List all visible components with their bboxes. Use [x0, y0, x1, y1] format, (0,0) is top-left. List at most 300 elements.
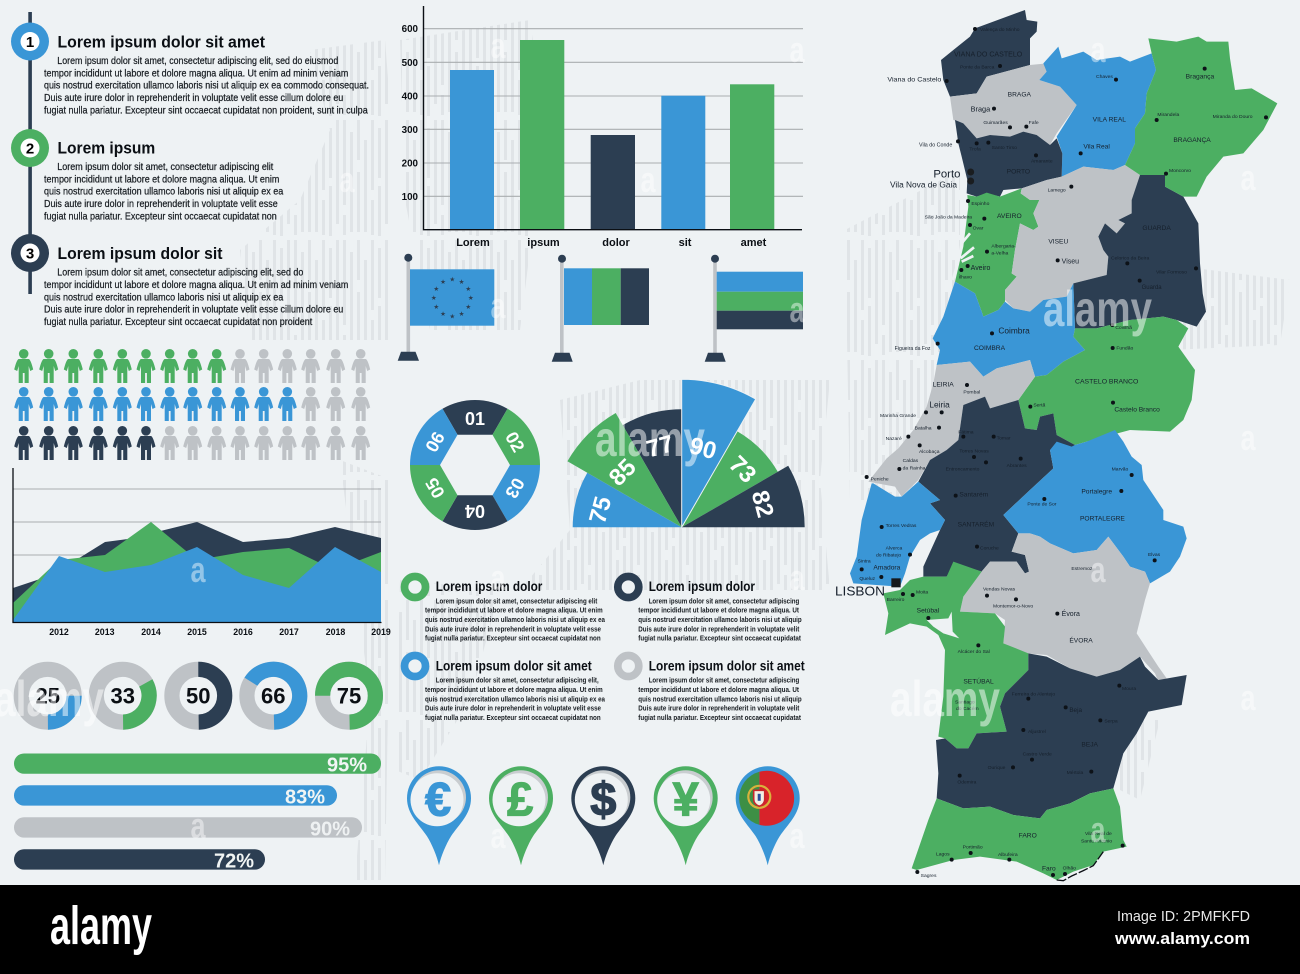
donut 33	[87, 660, 159, 732]
year labels: 2013	[95, 627, 115, 637]
region labels	[933, 52, 1211, 839]
region: Aveiro	[955, 188, 1039, 317]
text block: dark	[618, 576, 802, 643]
people row green	[14, 349, 370, 383]
x axis labels: amet	[741, 237, 767, 249]
city labels: Alverca	[886, 545, 903, 551]
background stripe world map	[240, 20, 1290, 880]
city labels: Ílhavo	[959, 274, 972, 281]
text block: green: Lorem ipsum dolor sit amet, consectetur adipiscing elit	[436, 596, 598, 605]
large city labels	[835, 73, 1214, 873]
step 3 body text: fugiat nulla pariatur. Excepteur sint occaecat cupidatat non proident	[44, 317, 312, 328]
small watermarks: a	[1240, 677, 1256, 718]
region: Bragança	[1125, 37, 1277, 197]
city labels: Alcácer do Sal	[958, 649, 990, 655]
sector 75	[573, 473, 682, 527]
city labels: Santiago	[955, 699, 975, 705]
segment 02	[485, 404, 548, 478]
small watermarks: a	[1240, 157, 1256, 198]
bar 95%	[14, 754, 381, 777]
city labels: Nazaré	[886, 436, 902, 442]
segment 01	[442, 400, 508, 435]
year labels: 2019	[371, 627, 391, 637]
text block: blue: Duis aute irure dolor in reprehenderit in voluptate velit esse	[425, 704, 601, 713]
region: Viseu	[1005, 165, 1140, 312]
text block: dark: quis nostrud exercitation ullamco laboris nisi ut aliquip	[638, 615, 802, 624]
city labels: Aljustrel	[1028, 729, 1046, 735]
large city labels: Évora	[1062, 609, 1080, 618]
large city labels: Bragança	[1186, 73, 1214, 80]
city labels: Marinha Grande	[880, 413, 916, 419]
donut 66	[237, 659, 310, 732]
EU stars: ★	[440, 278, 446, 286]
large city labels: Viana do Castelo	[887, 77, 942, 84]
sector 77	[623, 409, 682, 527]
city labels: Coruche	[980, 546, 999, 552]
text block: gray: Duis aute irure dolor in reprehenderit in voluptate velit	[638, 704, 800, 713]
sector 73: 73	[723, 451, 761, 489]
region labels: AVEIRO	[997, 213, 1022, 220]
city labels: Queluz	[859, 576, 876, 582]
city labels: Peniche	[871, 476, 889, 482]
city labels: Montemor-o-Novo	[993, 603, 1033, 609]
flag: vertical stripes	[552, 255, 649, 362]
segment 05	[402, 452, 465, 526]
city labels: Fátima	[958, 429, 974, 435]
timeline bar	[28, 12, 32, 294]
region labels: BRAGANÇA	[1173, 137, 1211, 144]
city labels: Guimarães	[983, 120, 1008, 126]
segment 04	[442, 495, 508, 530]
city labels: Celorico da Beira	[1111, 255, 1149, 261]
city labels: Lagos	[936, 851, 950, 857]
segment 02: 02	[501, 428, 529, 456]
EU stars: ★	[440, 310, 446, 318]
small watermarks: a	[490, 557, 506, 598]
flag: EU	[398, 254, 494, 361]
region: Faro	[912, 788, 1127, 880]
area chart	[13, 468, 391, 637]
y axis labels: 200	[402, 158, 419, 170]
large city labels: Beja	[1069, 707, 1082, 714]
large city labels: LISBON	[835, 584, 885, 598]
segment 03: 03	[501, 474, 529, 502]
pin: Portugal flag	[736, 766, 800, 865]
region labels: LEIRIA	[933, 382, 954, 389]
Sado estuary	[927, 612, 959, 638]
city labels: Miranda do Douro	[1213, 114, 1253, 120]
large city labels: Vila Nova de Gaia	[890, 180, 957, 190]
region: Lisbon	[850, 482, 945, 587]
text block: blue: quis nostrud exercitation ullamco laboris nisi ut aliquip ex ea	[425, 694, 606, 703]
large city labels: Guarda	[1142, 285, 1162, 291]
step 2 body text: tempor incididunt ut labore et dolore magna aliqua. Ut enim	[44, 174, 279, 185]
city labels: Estremoz	[1071, 566, 1093, 572]
donut 50	[172, 669, 225, 722]
sector 75: 75	[584, 494, 617, 526]
pin: euro: €	[425, 772, 451, 825]
city labels: Pombal	[963, 389, 980, 395]
step 2 heading: Lorem ipsum	[58, 140, 155, 158]
text block: green: Duis aute irure dolor in reprehenderit in voluptate velit esse	[425, 624, 601, 633]
step 3 body text: Lorem ipsum dolor sit amet, consectetur adipiscing elit, sed do	[57, 268, 304, 279]
step 3 badge: 3	[26, 246, 34, 262]
segment 05: 05	[421, 474, 449, 502]
city labels: Caldas	[903, 458, 919, 464]
region labels: FARO	[1019, 832, 1037, 839]
city labels: Mirandela	[1157, 112, 1179, 118]
EU stars: ★	[433, 303, 439, 311]
city labels: do Cacém	[956, 706, 979, 712]
small watermarks: a	[1090, 809, 1106, 850]
text block: green: tempor incididunt ut labore et dolore magna aliqua. Ut enim	[425, 606, 603, 615]
city labels: Ovar	[973, 225, 984, 231]
region labels: CASTELO BRANCO	[1075, 378, 1138, 385]
city labels: São João da Madeira	[925, 215, 972, 221]
step 2 badge	[11, 129, 49, 167]
text block: green: fugiat nulla pariatur. Excepteur sint occaecat cupidatat non	[425, 634, 601, 643]
people row blue	[14, 387, 370, 421]
step 3 heading: Lorem ipsum dolor sit	[58, 245, 223, 263]
city labels: Barreiro	[887, 597, 905, 603]
bar 90%	[14, 817, 362, 840]
step 1 body text	[44, 56, 369, 116]
large city labels: Coimbra	[998, 325, 1030, 335]
large city labels: Portalegre	[1081, 489, 1112, 496]
city dots	[862, 29, 1266, 875]
city labels: do Ribatejo	[876, 553, 901, 559]
small watermarks: a	[190, 549, 206, 590]
small watermarks: a	[1090, 549, 1106, 590]
step 2 body text: fugiat nulla pariatur. Excepteur sint occaecat cupidatat non	[44, 211, 277, 222]
text block: dark: Duis aute irure dolor in reprehenderit in voluptate velit	[638, 624, 800, 633]
segment 01: 01	[465, 409, 485, 429]
region labels: PORTALEGRE	[1080, 516, 1125, 523]
step 3 body text: quis nostrud exercitation ullamco laboris nisi ut aliquip ex ea	[44, 292, 284, 303]
step 3 body text	[44, 268, 348, 328]
text block: blue: Lorem ipsum dolor sit amet	[436, 659, 592, 674]
text block: green: quis nostrud exercitation ullamco laboris nisi ut aliquip ex ea	[425, 615, 606, 624]
EU stars: ★	[431, 294, 437, 302]
chart axes	[13, 468, 382, 622]
pin: dollar	[571, 766, 635, 865]
EU stars: ★	[468, 294, 474, 302]
footer bar	[0, 885, 1300, 974]
pin: yen	[654, 766, 718, 865]
region: Évora	[960, 533, 1167, 682]
region: Beja	[936, 653, 1187, 818]
pin: yen: ¥	[673, 772, 699, 825]
region: Leiria	[868, 360, 1035, 497]
city labels: Vendas Novas	[983, 587, 1016, 593]
region: Santarém	[918, 397, 1075, 577]
pin: euro	[407, 766, 471, 865]
region: Guarda	[1073, 175, 1206, 328]
sector 90: 90	[687, 432, 719, 465]
sector 90	[682, 379, 756, 527]
large city labels: Setúbal	[917, 608, 940, 615]
small watermarks: a	[790, 29, 805, 70]
city labels: Trofa	[969, 147, 981, 153]
text block: blue	[404, 656, 606, 722]
sector 77: 77	[644, 430, 676, 463]
city labels: Batalha	[915, 425, 932, 431]
Aveiro lagoon	[953, 233, 974, 280]
Lisbon marker	[891, 578, 901, 587]
pictogram: people rows	[14, 349, 370, 460]
text block: dark: Lorem ipsum dolor	[649, 579, 756, 594]
y axis labels: 600	[402, 24, 419, 35]
step 3 body text: Duis aute irure dolor in reprehenderit in voluptate velit esse cillum dolore eu	[44, 305, 343, 316]
step 1 badge: 1	[26, 34, 34, 51]
small watermarks: a	[1240, 417, 1256, 458]
text block: gray: quis nostrud exercitation ullamco laboris nisi ut aliquip	[638, 694, 802, 703]
large city labels: Porto	[933, 168, 960, 180]
text block: dark: Lorem ipsum dolor sit amet, consectetur adipiscing	[649, 596, 800, 605]
segment 04: 04	[465, 501, 485, 521]
region labels: SETÚBAL	[963, 676, 994, 685]
city labels: Chaves	[1096, 74, 1113, 80]
city labels: Ferreira do Alentejo	[1012, 691, 1055, 697]
region labels: VISEU	[1048, 238, 1068, 245]
city labels: Moncorvo	[1169, 168, 1191, 174]
pin: dollar: $	[590, 772, 616, 825]
city labels: Vilar Formoso	[1156, 270, 1187, 276]
region labels: COIMBRA	[974, 345, 1006, 352]
city labels: Olhão	[1063, 865, 1076, 871]
city labels: Sintra	[858, 558, 871, 564]
city labels: Lamego	[1048, 187, 1066, 193]
step 3 body text: tempor incididunt ut labore et dolore magna aliqua. Ut enim ad minim veniam	[44, 280, 348, 291]
people row dark	[14, 426, 370, 460]
small watermarks: a	[640, 159, 656, 200]
donut 33: 33	[110, 684, 135, 708]
donut row	[21, 659, 375, 732]
y axis labels: 300	[402, 125, 419, 136]
small watermarks: a	[490, 285, 506, 326]
large city labels: Leiria	[929, 399, 950, 409]
region labels: SANTARÉM	[958, 520, 994, 529]
step 2 body text	[44, 162, 284, 222]
text block: green: Lorem ipsum dolor	[436, 579, 543, 594]
blue area series	[13, 547, 381, 622]
EU stars: ★	[465, 303, 471, 311]
y axis labels: 400	[402, 92, 419, 102]
city labels: Fafe	[1029, 120, 1039, 126]
city labels: Marvão	[1112, 467, 1129, 473]
region labels: BRAGA	[1008, 92, 1032, 99]
city labels: Alcobaça	[919, 449, 940, 455]
city labels: Albergaria-	[991, 243, 1016, 249]
region labels: ÉVORA	[1069, 635, 1093, 644]
small watermarks: a	[490, 25, 506, 66]
text block: dark: tempor incididunt ut labore et dolore magna aliqua. Ut	[638, 606, 799, 615]
text block: gray: fugiat nulla pariatur. Excepteur sint occaecat cupidatat	[638, 713, 801, 722]
city labels: Torres Novas	[959, 449, 989, 455]
step 1 body text: Duis aute irure dolor in reprehenderit in voluptate velit esse cillum dolore eu	[44, 93, 343, 104]
progress bars	[14, 754, 381, 872]
text block: gray: Lorem ipsum dolor sit amet, consectetur adipiscing	[649, 676, 800, 685]
text block: green	[404, 576, 606, 643]
EU stars: ★	[459, 310, 465, 318]
region: Viana do Castelo	[941, 10, 1037, 97]
city labels: Odemira	[957, 779, 977, 785]
small watermarks: a	[190, 805, 206, 846]
region labels: VIANA DO CASTELO	[954, 52, 1023, 59]
city labels: Vila do Conde	[919, 143, 952, 149]
step 1 body text: quis nostrud exercitation ullamco laboris nisi ut aliquip ex ea commodo consequat.	[44, 81, 369, 92]
flag: horizontal stripes	[705, 255, 803, 362]
city labels: Figueira da Foz	[895, 346, 931, 352]
bar 95%: 95%	[327, 755, 367, 777]
sector 73	[682, 431, 778, 527]
city labels: Amarante	[1031, 159, 1053, 165]
sector 85: 85	[604, 454, 642, 492]
image id: Image ID: 2PMFKFD	[1117, 908, 1250, 925]
small watermarks: a	[790, 815, 805, 856]
bar 83%	[14, 785, 337, 808]
text block: gray: tempor incididunt ut labore et dolore magna aliqua. Ut	[638, 685, 799, 694]
city labels: Mértola	[1067, 770, 1084, 776]
year labels: 2017	[279, 627, 299, 637]
bar 72%	[14, 849, 265, 872]
large city labels: Santarém	[959, 492, 989, 499]
EU stars: ★	[465, 285, 471, 293]
large city labels: Viseu	[1062, 258, 1079, 265]
y axis labels: 100	[402, 192, 419, 203]
alamy logo: alamy	[50, 896, 152, 956]
bar 72%: 72%	[214, 850, 254, 872]
large watermarks: alamy	[1043, 281, 1152, 337]
large city labels: Castelo Branco	[1114, 407, 1160, 414]
step 3 badge	[11, 234, 49, 272]
year labels: 2016	[233, 627, 253, 637]
large city labels: Vila Real	[1083, 144, 1110, 151]
city labels	[858, 27, 1253, 879]
step 1 heading: Lorem ipsum dolor sit amet	[58, 34, 265, 52]
small watermarks: a	[790, 557, 805, 598]
city labels: Santo António	[1081, 838, 1112, 844]
step 2 badge: 2	[26, 140, 34, 158]
city labels: Entroncamento	[946, 466, 980, 472]
region labels: BEJA	[1081, 742, 1099, 749]
region: Setúbal	[883, 562, 1028, 748]
map of Portugal	[835, 10, 1277, 881]
city labels: Fundão	[1116, 346, 1133, 352]
city labels: Vila Real de	[1085, 831, 1112, 837]
city labels: Santo Tirso	[992, 145, 1017, 151]
bar chart	[402, 6, 803, 249]
small watermarks: a	[790, 289, 805, 330]
large city dots	[960, 172, 981, 181]
x axis labels: sit	[679, 237, 692, 249]
x axis labels	[456, 237, 767, 249]
region labels: GUARDA	[1142, 225, 1171, 232]
city labels: Ponte da Barca	[960, 64, 995, 70]
region: Castelo Branco	[1018, 317, 1195, 445]
y axis labels: 500	[402, 58, 419, 69]
text block: gray: Lorem ipsum dolor sit amet	[649, 659, 805, 674]
city labels: Abrantes	[1007, 463, 1027, 469]
large city labels: Faro	[1042, 866, 1056, 873]
small watermarks: a	[340, 159, 355, 200]
text block: blue: fugiat nulla pariatur. Excepteur sint occaecat cupidatat non	[425, 713, 601, 722]
sector 82	[682, 466, 805, 527]
site url: www.alamy.com	[1114, 929, 1250, 948]
step 1 body text: fugiat nulla pariatur. Excepteur sint occaecat cupidatat non proident, sunt in culpa	[44, 105, 368, 116]
segment 06	[402, 404, 465, 478]
text block: dark: fugiat nulla pariatur. Excepteur sint occaecat cupidatat	[638, 634, 801, 643]
region: Braga	[950, 63, 1077, 145]
EU stars: ★	[459, 278, 465, 286]
city labels: Ourique	[988, 765, 1006, 771]
small watermarks: a	[1090, 29, 1106, 70]
step 1 body text: tempor incididunt ut labore et dolore magna aliqua. Ut enim ad minim veniam	[44, 68, 348, 79]
large city labels: Braga	[971, 105, 991, 114]
donut 25	[21, 669, 74, 722]
EU stars: ★	[449, 312, 455, 320]
city labels: Serpa	[1104, 718, 1118, 724]
donut 25: 25	[35, 684, 60, 708]
pin: pound: £	[507, 772, 533, 825]
large city labels: Aveiro	[971, 265, 990, 272]
segment 06: 06	[421, 428, 449, 456]
donut 75	[323, 669, 375, 722]
year labels: 2012	[49, 627, 69, 637]
dark area series	[13, 522, 381, 622]
text block: gray	[618, 656, 805, 722]
step 2 body text: Duis aute irure dolor in reprehenderit in voluptate velit esse	[44, 199, 278, 210]
donut 50: 50	[186, 684, 211, 708]
small watermarks: a	[490, 815, 506, 856]
step 1 body text: Lorem ipsum dolor sit amet, consectetur adipiscing elit, sed do eiusmod	[57, 56, 339, 67]
city labels: Ponte de Sor	[1027, 502, 1057, 508]
region labels: VILA REAL	[1093, 117, 1126, 124]
EU stars: ★	[433, 285, 439, 293]
city labels: Tomar	[997, 435, 1011, 441]
x axis labels: ipsum	[527, 237, 560, 249]
large watermarks: alamy	[595, 411, 705, 467]
bar 83%: 83%	[285, 786, 325, 808]
large city labels: Amadora	[873, 564, 901, 571]
EU stars: ★	[449, 276, 455, 284]
region: Coimbra	[933, 282, 1085, 377]
sector 85	[567, 413, 682, 527]
region: Porto	[955, 120, 1062, 197]
large watermarks	[0, 281, 1152, 727]
city labels: a-Velha	[991, 251, 1008, 257]
year labels: 2015	[187, 627, 207, 637]
city labels: Moura	[1122, 686, 1136, 692]
city labels: Portimão	[963, 845, 983, 851]
x axis labels: Lorem	[456, 237, 490, 249]
donut 75: 75	[337, 684, 361, 708]
city labels: da Rainha	[903, 466, 926, 472]
bar 90%: 90%	[310, 818, 350, 840]
city labels: Sertã	[1033, 403, 1045, 409]
year labels: 2014	[141, 627, 161, 637]
region: Vila Real	[1039, 47, 1156, 177]
city labels: Elvas	[1148, 552, 1161, 558]
year labels	[49, 627, 391, 637]
Faro coast marsh line	[1057, 852, 1103, 881]
city labels: Sagres	[921, 873, 937, 879]
numbered step list	[11, 12, 369, 328]
step 2 body text: Lorem ipsum dolor sit amet, consectetur adipiscing elit	[57, 162, 273, 173]
pin: pound	[489, 766, 553, 865]
region labels: PORTO	[1007, 169, 1030, 176]
x axis labels: dolor	[602, 237, 630, 249]
